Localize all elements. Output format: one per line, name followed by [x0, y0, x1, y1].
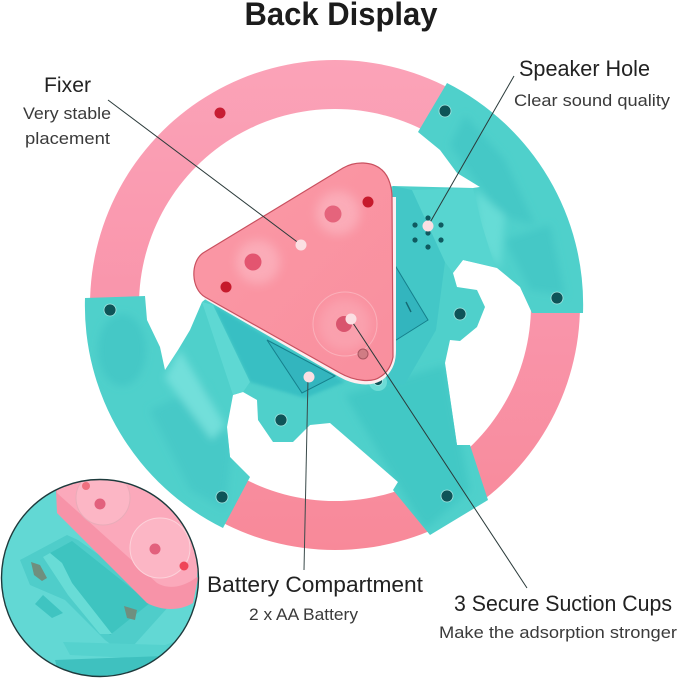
slot wall: [43, 553, 112, 634]
label: speaker hole: Speaker Hole: [519, 56, 650, 81]
label: fixer: placement: [25, 129, 110, 148]
label: fixer: Very stable: [23, 104, 111, 123]
right hub facet: [412, 188, 495, 273]
leader: suction cups: [351, 320, 527, 588]
battery cover outline, left part: [267, 340, 335, 393]
lighter rim on left of hub: [202, 302, 250, 395]
speaker holes: [412, 215, 444, 250]
inset ring outline: [2, 480, 198, 676]
label: fixer: [23, 74, 111, 148]
battery slot: [50, 541, 150, 635]
label: fixer: Fixer: [44, 74, 91, 97]
boss below mount: [369, 373, 387, 391]
leader: battery compartment: [304, 378, 308, 570]
battery cover outline, right part: [393, 262, 428, 342]
inset: battery compartment close-up: [2, 470, 205, 679]
label: battery compartment: 2 x AA Battery: [249, 605, 359, 624]
side tab: [35, 595, 63, 618]
steering wheel: [85, 60, 583, 550]
leader: fixer: [108, 100, 300, 244]
label: battery compartment: Battery Compartment: [207, 572, 423, 597]
bottom bar: [63, 642, 174, 658]
red hole in ring: [214, 108, 226, 118]
pink battery housing: [56, 478, 198, 609]
label: speaker hole: Clear sound quality: [514, 91, 671, 110]
cover mark: [406, 302, 411, 312]
teal grips and hub silhouette: [85, 83, 583, 535]
label: battery compartment: [207, 572, 423, 624]
dark recess under mount: [213, 305, 345, 398]
pink wheel ring: [90, 60, 580, 550]
leader: speaker hole: [428, 76, 514, 226]
cup centres: [324, 206, 342, 222]
label: speaker hole: [514, 56, 671, 110]
triangular pink mount: [194, 163, 394, 382]
screw holes: [104, 105, 563, 503]
label: suction cups: [439, 591, 677, 642]
marker dots: [296, 220, 434, 382]
red holes: [362, 196, 374, 208]
right hub strip: [385, 186, 445, 385]
label: suction cups: 3 Secure Suction Cups: [454, 591, 672, 616]
suction cups: [236, 191, 371, 351]
hub and grip shading: [98, 115, 565, 530]
battery plate: [20, 535, 166, 644]
contacts: [31, 562, 47, 581]
label: suction cups: Make the adsorption stronger: [439, 623, 677, 642]
